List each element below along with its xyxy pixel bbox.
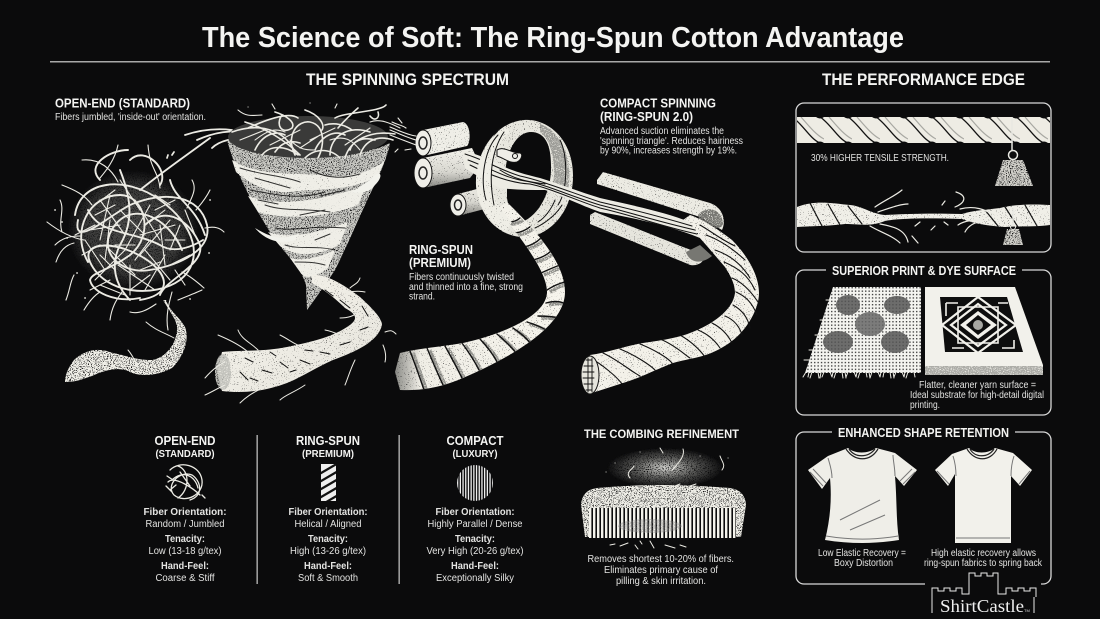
comparison column: open-end: Tenacity: bbox=[165, 534, 205, 545]
panel: print and dye surface: Flatter, cleaner yarn surface = bbox=[919, 380, 1036, 391]
text: compact spinning: 'spinning triangle'. Reduces hairiness bbox=[600, 136, 743, 147]
text: ring-spun premium: strand. bbox=[409, 292, 435, 302]
icon: helical strand bbox=[321, 464, 336, 501]
text: ring-spun premium: and thinned into a fine, strong bbox=[409, 282, 523, 293]
icon: small weight bbox=[1003, 208, 1023, 245]
text: compact spinning: COMPACT SPINNING bbox=[600, 96, 716, 110]
comparison column: open-end: Fiber Orientation: bbox=[144, 507, 226, 518]
comparison column: ring-spun: Soft & Smooth bbox=[298, 573, 358, 584]
comparison column: ring-spun: Hand-Feel: bbox=[304, 561, 352, 572]
text: open-end standard: Fibers jumbled, 'inside-out' orientation. bbox=[55, 112, 206, 123]
illustration: compact spinning cylinders bbox=[590, 172, 724, 265]
panel: shape retention: Low Elastic Recovery = bbox=[818, 548, 906, 559]
panel: combing refinement bbox=[581, 429, 746, 587]
comparison column: open-end: OPEN-END bbox=[154, 434, 216, 448]
panel: print and dye surface: printing. bbox=[910, 400, 940, 411]
panel: print and dye surface bbox=[796, 264, 1051, 415]
comparison column: ring-spun: (PREMIUM) bbox=[302, 449, 354, 460]
comparison column: compact: Highly Parallel / Dense bbox=[428, 519, 523, 530]
illustration: compact yarn bbox=[581, 215, 759, 394]
comparison column: compact: Tenacity: bbox=[455, 534, 495, 545]
icon: large weight bbox=[995, 117, 1033, 186]
heading: the performance edge: THE PERFORMANCE EDGE bbox=[822, 71, 1025, 89]
text: open-end standard: OPEN-END (STANDARD) bbox=[55, 96, 190, 110]
panel: shape retention: ring-spun fabrics to spring back bbox=[924, 558, 1043, 569]
comparison column: open-end: Hand-Feel: bbox=[161, 561, 209, 572]
comparison column: compact: Exceptionally Silky bbox=[436, 573, 514, 584]
illustration: spinning ring bbox=[476, 120, 573, 237]
text: ring-spun premium: Fibers continuously twisted bbox=[409, 272, 514, 283]
illustration: drafting rollers bbox=[390, 118, 507, 216]
panel: print and dye surface: Ideal substrate for high-detail digital bbox=[910, 390, 1044, 401]
comparison column: compact: Hand-Feel: bbox=[451, 561, 499, 572]
comparison column: open-end: Low (13-18 g/tex) bbox=[148, 546, 222, 557]
panel: combing refinement: THE COMBING REFINEMENT bbox=[584, 429, 739, 441]
comparison column: compact: Very High (20-26 g/tex) bbox=[426, 546, 524, 557]
heading: the spinning spectrum: THE SPINNING SPECTRUM bbox=[306, 71, 509, 89]
illustration: open-end tail bbox=[65, 300, 187, 382]
comparison column: ring-spun: High (13-26 g/tex) bbox=[290, 546, 366, 557]
logo: ShirtCastle: ShirtCastle bbox=[940, 596, 1024, 616]
icon: smooth printed fabric bbox=[925, 287, 1043, 375]
icon: rough fabric bbox=[803, 287, 921, 378]
illustration: parallel fibers through ring bbox=[462, 150, 700, 238]
comparison column: open-end: Coarse & Stiff bbox=[156, 573, 215, 584]
text: compact spinning: by 90%, increases strength by 19%. bbox=[600, 146, 737, 156]
panel: print and dye surface: SUPERIOR PRINT & DYE SURFACE bbox=[832, 264, 1016, 278]
text: ring-spun premium bbox=[409, 242, 523, 302]
icon: parallel fibers bbox=[457, 464, 493, 502]
comparison column: compact: Fiber Orientation: bbox=[436, 507, 514, 518]
panel: tensile strength bbox=[796, 103, 1051, 252]
illustration: ring-spun yarn bbox=[395, 202, 568, 392]
icon: fitted t-shirt bbox=[935, 448, 1032, 543]
icon: broken rope bbox=[797, 190, 1050, 243]
text: compact spinning: (RING-SPUN 2.0) bbox=[600, 109, 693, 124]
panel: shape retention: ENHANCED SHAPE RETENTION bbox=[838, 426, 1009, 440]
icon: strong rope bbox=[797, 117, 1050, 143]
comparison column: ring-spun: Tenacity: bbox=[308, 534, 348, 545]
text: compact spinning bbox=[600, 96, 743, 156]
illustration: thick open-end yarn bbox=[205, 275, 396, 403]
icon: tangle bbox=[166, 465, 205, 500]
panel: combing refinement: pilling & skin irritation. bbox=[616, 575, 706, 587]
icon: comb bbox=[581, 485, 746, 549]
logo: ShirtCastle bbox=[932, 573, 1036, 616]
text: compact spinning: Advanced suction eliminates the bbox=[600, 126, 724, 137]
panel: combing refinement: Eliminates primary cause of bbox=[604, 564, 718, 576]
panel: combing refinement: Removes shortest 10-20% of fibers. bbox=[588, 553, 734, 565]
title: The Science of Soft: The Ring-Spun Cotton Advantage bbox=[202, 22, 904, 54]
comparison column: ring-spun: RING-SPUN bbox=[296, 434, 360, 448]
comparison column: compact bbox=[426, 434, 524, 584]
comparison column: open-end: (STANDARD) bbox=[156, 449, 214, 460]
text: open-end standard bbox=[55, 96, 206, 123]
text: ring-spun premium: RING-SPUN bbox=[409, 242, 473, 257]
icon: particles above comb bbox=[606, 448, 728, 490]
panel: shape retention: Boxy Distortion bbox=[834, 558, 893, 569]
illustration: carding funnel bbox=[227, 103, 400, 310]
icon: boxy t-shirt bbox=[808, 448, 917, 543]
comparison column: ring-spun bbox=[288, 434, 368, 584]
comparison column: compact: (LUXURY) bbox=[452, 449, 498, 460]
comparison column: compact: COMPACT bbox=[446, 434, 504, 448]
illustration: ring front band and traveller bbox=[476, 126, 522, 232]
panel: shape retention bbox=[796, 426, 1051, 584]
logo: ShirtCastle: TM bbox=[1024, 608, 1030, 613]
comparison column: open-end: Random / Jumbled bbox=[146, 519, 224, 530]
comparison column: ring-spun: Helical / Aligned bbox=[294, 519, 362, 530]
comparison column: open-end bbox=[144, 434, 226, 584]
panel: shape retention: High elastic recovery allows bbox=[931, 548, 1036, 559]
comparison column: ring-spun: Fiber Orientation: bbox=[288, 507, 368, 518]
panel: tensile strength: 30% HIGHER TENSILE STRENGTH. bbox=[811, 153, 949, 164]
text: ring-spun premium: (PREMIUM) bbox=[409, 255, 471, 270]
illustration: tangled fiber ball bbox=[47, 129, 250, 330]
